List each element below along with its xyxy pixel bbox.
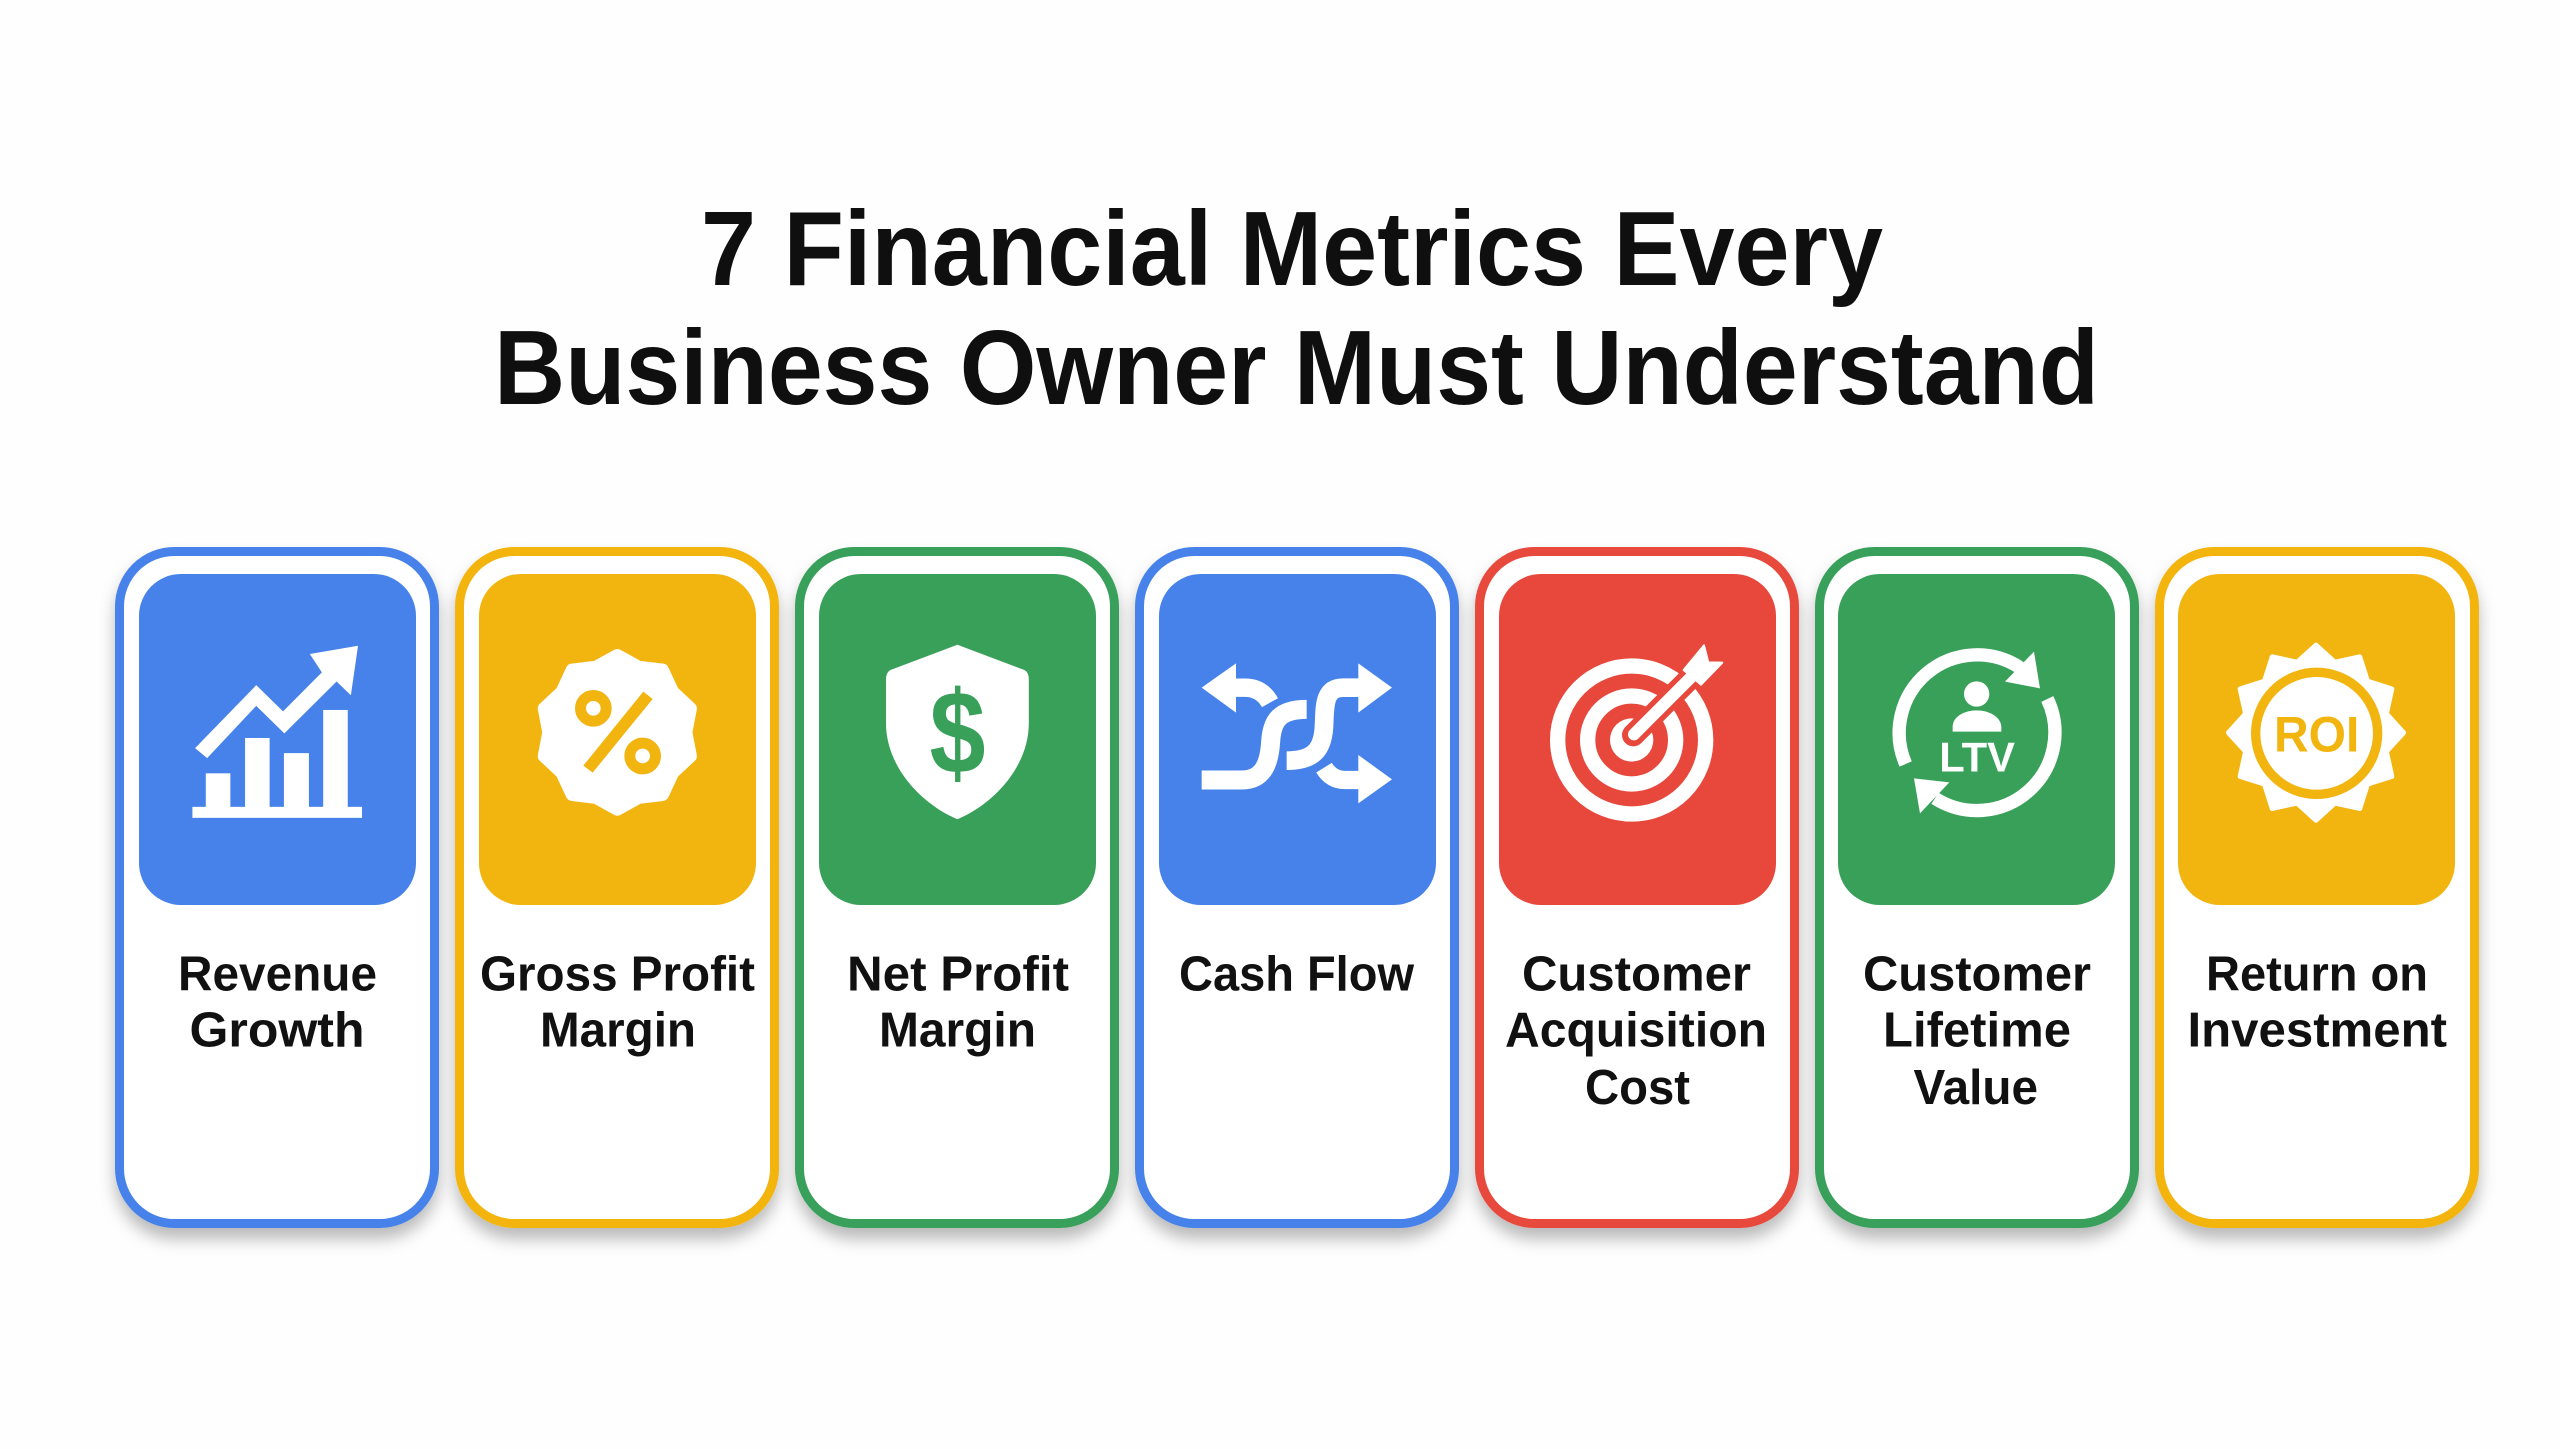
label: Customer <box>1863 948 2091 1002</box>
label: Value <box>1914 1061 2038 1115</box>
card frame <box>2160 552 2474 1224</box>
panel: Cash Flow <box>1140 552 1454 1224</box>
icon tile <box>1838 574 2115 905</box>
icon tile <box>479 574 756 905</box>
label: Margin <box>540 1004 696 1058</box>
label: Margin <box>879 1004 1036 1058</box>
card frame <box>1820 552 2134 1224</box>
card frame <box>800 552 1114 1224</box>
icon: LTV cycle with person <box>1899 652 2055 813</box>
icon: LTV cycle with person: LTV <box>1939 734 2015 781</box>
label: Return on <box>2206 948 2428 1002</box>
label <box>2188 948 2447 1058</box>
icon: target with arrow <box>1558 645 1722 814</box>
card frame <box>1480 552 1794 1224</box>
label: Net Profit <box>847 948 1069 1002</box>
icon tile <box>819 574 1096 905</box>
panel: Customer Lifetime Value <box>1820 552 2134 1224</box>
label: Revenue <box>178 948 377 1002</box>
label: Cost <box>1585 1061 1690 1115</box>
panel: Return on Investment <box>2160 552 2474 1224</box>
panel: Revenue Growth <box>120 552 434 1224</box>
icon: rising bar chart with arrow <box>192 646 362 818</box>
icon: ROI badge <box>2229 645 2403 820</box>
icon tile <box>139 574 416 905</box>
card frame <box>460 552 774 1224</box>
label: Cash Flow <box>1179 948 1415 1002</box>
icon tile <box>2178 574 2455 905</box>
panel: Net Profit Margin <box>800 552 1114 1224</box>
label <box>1505 948 1767 1115</box>
label: Investment <box>2188 1004 2447 1058</box>
label <box>1863 948 2091 1115</box>
label: Customer <box>1522 948 1751 1002</box>
title: Business Owner Must Understand <box>494 309 2099 427</box>
icon: percent badge <box>544 656 690 809</box>
icon: ROI badge: ROI <box>2274 707 2359 763</box>
icon: shield with dollar <box>886 645 1029 819</box>
label: Acquisition <box>1505 1004 1767 1058</box>
label: Gross Profit <box>480 948 755 1002</box>
label: Growth <box>190 1004 364 1058</box>
label: Lifetime <box>1883 1004 2071 1058</box>
label <box>480 948 755 1058</box>
card frame <box>120 552 434 1224</box>
title <box>494 190 2099 427</box>
icon: crossing flow arrows <box>1202 663 1392 803</box>
panel: Gross Profit Margin <box>460 552 774 1224</box>
panel: Customer Acquisition Cost <box>1480 552 1794 1224</box>
icon tile <box>1499 574 1776 905</box>
icon tile <box>1159 574 1436 905</box>
icon: shield with dollar: $ <box>930 667 986 799</box>
title: 7 Financial Metrics Every <box>701 190 1883 308</box>
card frame <box>1140 552 1454 1224</box>
label <box>178 948 377 1058</box>
label <box>847 948 1069 1058</box>
